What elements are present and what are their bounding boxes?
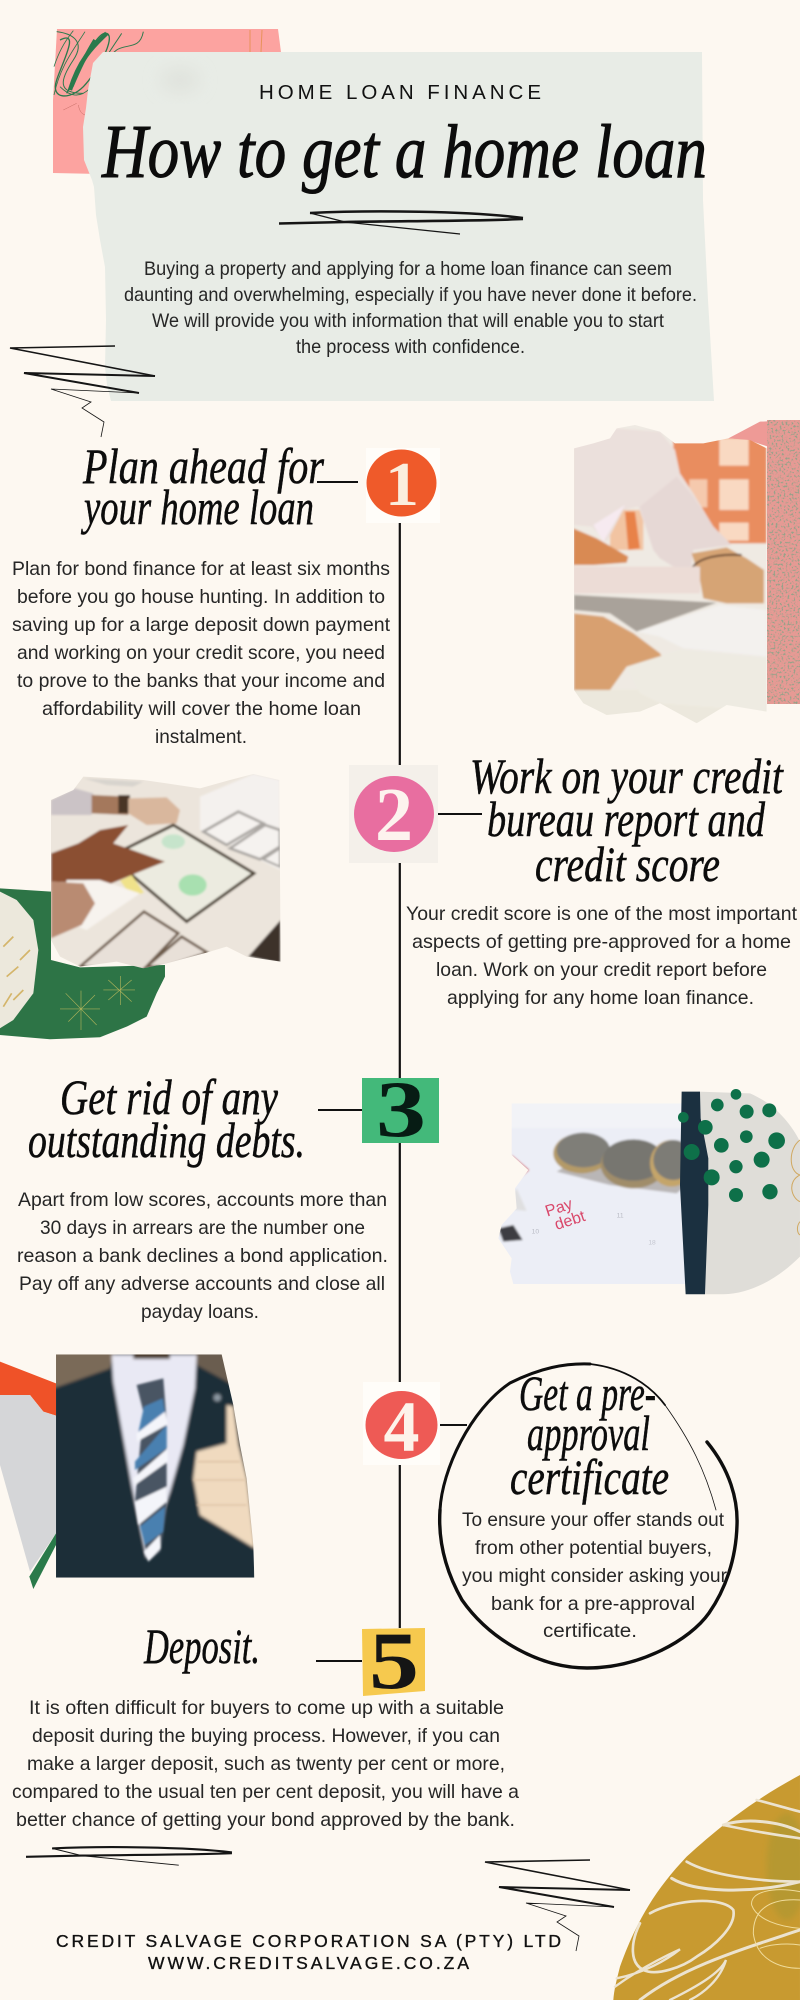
step 4 body xyxy=(462,1509,727,1642)
photo xyxy=(574,425,766,723)
step 3 number badge xyxy=(362,1066,439,1154)
green paper shape xyxy=(0,888,165,1039)
step 3 heading: Get rid of any xyxy=(60,1069,279,1125)
step 1 heading xyxy=(80,438,324,535)
step 1 body: Plan for bond finance for at least six months xyxy=(12,558,390,580)
grey paper xyxy=(0,1395,56,1572)
step 3 heading xyxy=(28,1069,305,1168)
zigzag scribble: lower right xyxy=(485,1860,630,1951)
cream shape xyxy=(0,892,38,1028)
step 4 body: you might consider asking your xyxy=(462,1565,727,1587)
step 2 connector xyxy=(438,813,482,815)
company name: CREDIT SALVAGE CORPORATION SA (PTY) LTD xyxy=(56,1931,561,1951)
gold specks xyxy=(3,937,30,1007)
photo xyxy=(53,1352,257,1582)
step 2 body: Your credit score is one of the most important xyxy=(406,903,798,925)
collage: green shape and tablet photo xyxy=(0,770,283,1039)
step 4 xyxy=(363,1364,737,1668)
intro text: We will provide you with information that will enable you to start xyxy=(152,310,665,332)
step 2 number badge xyxy=(349,765,438,863)
step 1 connector xyxy=(317,481,358,483)
paper crease xyxy=(160,68,200,92)
step 2 heading xyxy=(470,748,784,892)
footer xyxy=(56,1931,561,1973)
pink paper xyxy=(53,29,282,174)
green strip xyxy=(29,1533,56,1589)
step 5 heading: Deposit. xyxy=(143,1618,260,1674)
calendar writing xyxy=(532,1200,656,1244)
step 5 body xyxy=(12,1697,519,1831)
step 5 xyxy=(12,1615,519,1831)
intro text xyxy=(124,258,697,358)
website: WWW.CREDITSALVAGE.CO.ZA xyxy=(148,1953,469,1973)
step 5 number badge xyxy=(362,1615,425,1706)
step 4 body: certificate. xyxy=(543,1620,637,1642)
tablet photo xyxy=(47,770,283,970)
calendar writing: debt xyxy=(553,1208,588,1234)
calendar writing: Pay xyxy=(543,1196,575,1220)
step 3 body: 30 days in arrears are the number one xyxy=(40,1217,365,1239)
step 1 heading: Plan ahead for xyxy=(82,438,324,494)
textured pink strip xyxy=(767,420,800,704)
intro text: Buying a property and applying for a home loan finance can seem xyxy=(144,258,672,280)
step 1 number badge xyxy=(366,448,440,523)
torn paper panel xyxy=(83,52,714,401)
step 3 number badge: 3 xyxy=(376,1066,426,1154)
step 5 body: make a larger deposit, such as twenty per cent or more, xyxy=(27,1753,505,1775)
mustard corner shape xyxy=(613,1775,800,2000)
timeline vertical line xyxy=(399,523,401,1628)
gold stars xyxy=(60,976,135,1030)
step 1 xyxy=(12,438,440,748)
step 3 body: payday loans. xyxy=(141,1301,259,1323)
step 5 body: It is often difficult for buyers to come up with a suitable xyxy=(29,1697,504,1719)
step 3 connector xyxy=(318,1109,362,1111)
step 4 connector xyxy=(440,1424,467,1426)
collage: suit and thumbs up photo xyxy=(0,1352,257,1589)
step 2 xyxy=(349,748,798,1009)
step 5 body: deposit during the buying process. However, if you can xyxy=(32,1725,500,1747)
step 3 body: Apart from low scores, accounts more than xyxy=(18,1189,387,1211)
orange paper xyxy=(0,1362,56,1416)
collage: coins photo and dotted paper xyxy=(490,1089,800,1294)
step 2 heading: credit score xyxy=(535,836,720,892)
step 1 body: and working on your credit score, you need xyxy=(17,642,385,664)
step 1 heading: your home loan xyxy=(80,479,314,535)
calendar writing: 18 xyxy=(648,1239,656,1246)
step 3 xyxy=(17,1066,439,1323)
step 2 body: applying for any home loan finance. xyxy=(447,987,754,1009)
step 3 body: reason a bank declines a bond application. xyxy=(17,1245,388,1267)
calendar writing: 11 xyxy=(617,1213,624,1220)
zigzag scribble: top left xyxy=(10,346,155,437)
coins photo xyxy=(498,1104,685,1284)
step 4 heading xyxy=(510,1365,669,1505)
header panel xyxy=(53,29,714,401)
cream scribbles xyxy=(615,1800,800,2000)
step 5 connector xyxy=(316,1660,362,1662)
green scribble xyxy=(54,31,143,115)
intro text: daunting and overwhelming, especially if you have never done it before. xyxy=(124,284,697,306)
step 1 body: affordability will cover the home loan xyxy=(42,698,361,720)
step 2 body xyxy=(406,903,798,1009)
step 2 body: loan. Work on your credit report before xyxy=(436,959,767,981)
kicker: HOME LOAN FINANCE xyxy=(259,81,541,104)
step 5 body: better chance of getting your bond approved by the bank. xyxy=(16,1809,515,1831)
step 4 body: bank for a pre-approval xyxy=(491,1593,695,1615)
step 4 number badge xyxy=(363,1382,440,1467)
step 4 body: To ensure your offer stands out xyxy=(462,1509,725,1531)
step 2 body: aspects of getting pre-approved for a home xyxy=(412,931,791,953)
step 4 number badge: 4 xyxy=(384,1387,420,1467)
step 3 body: Pay off any adverse accounts and close all xyxy=(19,1273,385,1295)
step 4 body: from other potential buyers, xyxy=(475,1537,712,1559)
step 1 body: instalment. xyxy=(155,726,247,748)
step 4 heading: certificate xyxy=(510,1449,669,1505)
step 1 body: saving up for a large deposit down payment xyxy=(12,614,391,636)
grey dotted paper xyxy=(698,1092,800,1294)
step 1 body: to prove to the banks that your income and xyxy=(17,670,385,692)
step 1 body: before you go house hunting. In addition to xyxy=(17,586,385,608)
collage: photo of people reviewing documents xyxy=(574,420,800,723)
calendar writing: 10 xyxy=(532,1228,539,1235)
step 4 heading: Get a pre- xyxy=(519,1365,656,1421)
step 3 heading: outstanding debts. xyxy=(28,1112,305,1168)
step 1 body xyxy=(12,558,391,748)
salmon paper corner xyxy=(728,421,780,448)
step 1 number badge: 1 xyxy=(385,451,419,519)
step 5 body: compared to the usual ten per cent deposit, you will have a xyxy=(12,1781,519,1803)
hand drawn circle xyxy=(440,1364,737,1668)
step 4 heading: approval xyxy=(527,1405,650,1461)
gold loops xyxy=(791,1140,800,1235)
speckle xyxy=(767,1813,800,1920)
underline scribble: lower left xyxy=(26,1847,232,1865)
step 2 number badge: 2 xyxy=(375,773,413,857)
green dots xyxy=(678,1089,785,1202)
step 3 body xyxy=(17,1189,388,1323)
underline scribble xyxy=(279,211,523,234)
intro text: the process with confidence. xyxy=(296,336,525,358)
orange ink lines xyxy=(250,30,262,52)
step 5 number badge: 5 xyxy=(369,1615,419,1706)
navy strip xyxy=(680,1092,708,1294)
